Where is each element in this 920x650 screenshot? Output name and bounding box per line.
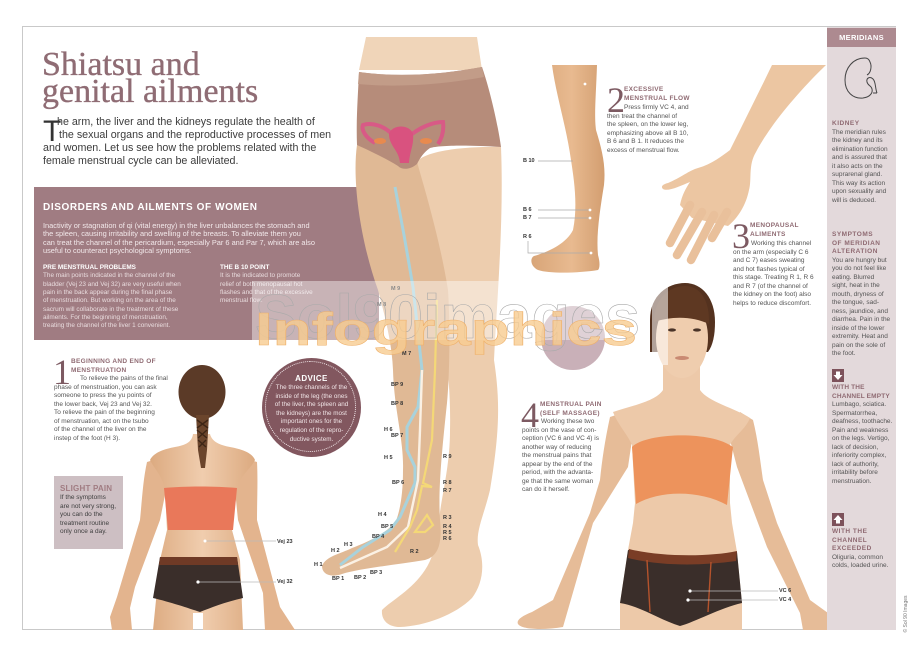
labels: B 6	[523, 207, 532, 213]
symptoms text: sight, heat in the	[832, 282, 880, 289]
sidebar heading	[827, 28, 896, 47]
illustration: conception vessel circle	[541, 306, 605, 370]
kidney text: will is deduced.	[832, 196, 876, 204]
step 2 body: the spleen, on the lower leg,	[607, 121, 688, 128]
right arm	[232, 455, 295, 630]
channel exceeded text	[832, 528, 888, 569]
symptoms text: extremity. Heat and	[832, 333, 888, 340]
point labels: H 2	[331, 548, 340, 554]
step 3 body: Working this channel	[751, 240, 811, 247]
pre menstrual problems: ailments. For the beginning of menstruation,	[43, 314, 168, 321]
step 4 body: ception (VC 6 and VC 4) is	[522, 435, 599, 442]
step 3 body: the kidney on the foot) also	[733, 291, 811, 298]
watermark orange text: Infographics	[255, 303, 637, 355]
channel exceeded text: colds, loaded urine.	[832, 562, 888, 569]
point labels: BP 3	[370, 570, 382, 576]
point labels: M 9	[391, 286, 400, 292]
top	[164, 486, 237, 530]
step 2 heading: EXCESSIVE	[624, 86, 664, 93]
symptoms text: You are hungry but	[832, 256, 887, 264]
kidney text	[832, 120, 888, 204]
figure: leg with B points	[523, 65, 605, 273]
step 2 body: B 6 and B 1. It reduces the	[607, 138, 684, 145]
advice text: inside of the leg (the ones	[275, 393, 348, 400]
point labels	[314, 286, 452, 582]
step 3 body: and hot flashes typical of	[733, 266, 805, 272]
step 1 body: someone to press the yu points of	[54, 392, 152, 399]
intro paragraph: and women. Let us see how the problems related with the	[43, 142, 316, 154]
channel empty text: menstruation.	[832, 478, 871, 484]
step 1 body: of the channel of the liver on the	[54, 426, 147, 433]
point labels: R 6	[443, 536, 452, 542]
title	[42, 46, 258, 110]
kidney text: the kidney and its	[832, 137, 883, 144]
step 4 body: Working these two	[541, 418, 594, 425]
figure: back view	[110, 365, 295, 630]
panel heading: DISORDERS AND AILMENTS OF WOMEN	[43, 202, 258, 213]
point labels: BP 6	[392, 480, 404, 486]
step 4 body: ge that the same woman	[522, 478, 593, 484]
panel intro text	[43, 221, 315, 255]
step 3 body	[733, 240, 814, 306]
callout body: only once a day.	[60, 528, 107, 535]
panel intro text: Inactivity or stagnation of qi (vital energy) in the liver unbalances the stomach and	[43, 221, 310, 230]
step 1 heading	[71, 358, 156, 374]
intro paragraph: female menstrual cycle can be alleviated.	[43, 155, 238, 167]
channel empty text: lack of authority,	[832, 460, 879, 468]
pre menstrual problems: PRE MENSTRUAL PROBLEMS	[43, 264, 136, 271]
icon: kidney	[844, 58, 878, 99]
step 1 text	[53, 352, 168, 442]
step 4 body: points on the vase of con-	[522, 426, 596, 434]
channel empty text: Spermatorrhea,	[832, 410, 877, 416]
labels	[523, 158, 592, 254]
symptoms text: the foot.	[832, 350, 856, 357]
step 1 body: the lower back, Vej 23 and Vej 32.	[54, 400, 152, 408]
labels: B 7	[523, 215, 532, 221]
point labels: BP 2	[354, 575, 366, 581]
advice text: important ones for the	[281, 418, 342, 425]
step 2 text	[607, 80, 690, 154]
point labels: BP 5	[381, 524, 393, 530]
kidney text: and is assured that	[832, 154, 887, 161]
channel empty text: CHANNEL EMPTY	[832, 392, 890, 400]
pre menstrual problems: bladder (Vej 23 and Vej 32) are very useful when	[43, 281, 181, 288]
pre menstrual problems: The main points indicated in the channel of the	[43, 272, 175, 279]
shorts	[153, 557, 243, 612]
step 2 body: excess of menstrual flow.	[607, 146, 680, 154]
step 3 text	[732, 216, 814, 306]
step 4 heading: MENSTRUAL PAIN	[540, 401, 602, 408]
points: Vej 32	[277, 579, 293, 585]
callout body: are not very strong,	[60, 502, 116, 510]
intro paragraph	[43, 116, 331, 167]
points	[196, 539, 293, 585]
point labels: BP 8	[391, 401, 403, 407]
advice text: the kidneys) are the most	[276, 410, 347, 417]
blue meridian: liver	[340, 187, 422, 565]
step 1 body: To relieve the pains of the final	[80, 375, 168, 382]
drop cap: T	[43, 115, 61, 148]
step 4 body: period, with the advanta-	[522, 469, 593, 476]
point labels: R 5	[443, 530, 452, 536]
step 3 heading: MENOPAUSAL	[750, 222, 799, 229]
watermark outline text: Sol90images	[255, 283, 640, 352]
channel exceeded text: WITH THE	[832, 528, 867, 535]
figure: front view	[518, 283, 828, 630]
left arm	[518, 412, 632, 629]
advice text: ductive system.	[290, 436, 333, 443]
step 2 heading	[624, 86, 690, 102]
symptoms text: OF MERIDIAN	[832, 240, 880, 246]
channel empty text: irritability before	[832, 469, 878, 476]
the B 10 point: THE B 10 POINT	[220, 264, 269, 271]
points	[686, 588, 792, 603]
orange top	[632, 435, 733, 505]
step 1 body: phase of menstruation, you can ask	[54, 384, 157, 390]
channel exceeded text: CHANNEL	[832, 536, 867, 544]
channel empty text: lack of decision,	[832, 444, 878, 450]
callout body	[60, 494, 116, 535]
channel empty text: Pain and weakness	[832, 426, 888, 434]
symptoms text: ALTERATION	[832, 248, 878, 255]
pre menstrual problems: treating the channel of the liver 1 convenient.	[43, 322, 170, 329]
hair and braid	[178, 365, 226, 468]
step 1 heading: BEGINNING AND END OF	[71, 358, 156, 365]
pre menstrual problems: sacrum will collaborate in the treatment of these	[43, 306, 178, 313]
point labels: BP 9	[391, 382, 403, 388]
dotted ring	[265, 361, 356, 452]
step 3 heading: ALIMENTS	[750, 230, 786, 238]
symptoms text: mouth, dryness of	[832, 290, 884, 298]
step 2 body: then treat the channel of	[607, 112, 677, 120]
symptoms text	[832, 231, 890, 357]
the B 10 point	[220, 264, 313, 304]
title: Shiatsu and	[42, 46, 200, 83]
point labels: M 7	[402, 351, 411, 357]
step 1 body: of menstruation, act on the tsubo	[54, 418, 149, 424]
symptoms text: pain on the sole of	[832, 342, 885, 348]
channel exceeded text: EXCEEDED	[832, 545, 872, 552]
head and hair	[650, 283, 715, 378]
panel intro text: the spleen, causing irritability and swelling of the breasts. To alleviate them you	[43, 229, 301, 238]
symptoms text: diarrhea. Pain in the	[832, 316, 890, 323]
labels: R 6	[523, 234, 532, 240]
callout heading: SLIGHT PAIN	[60, 484, 112, 493]
panel: meridians sidebar	[827, 27, 896, 630]
symptoms text: eating. Blurred	[832, 274, 874, 280]
symptoms text: you do not feel like	[832, 265, 886, 272]
symptoms text: inside of the lower	[832, 324, 884, 332]
advice text: regulation of the repro-	[280, 427, 343, 434]
step 4 body: can do it herself.	[522, 486, 570, 493]
point labels: R 3	[443, 515, 452, 521]
torso and legs	[613, 365, 750, 630]
number 4: 4	[521, 395, 539, 435]
callout: advice	[262, 358, 361, 457]
number 2: 2	[607, 80, 625, 120]
point labels: H 4	[378, 512, 388, 518]
copyright: © Sol 90 Images	[903, 595, 909, 633]
step 3 body: and R 7 (of the channel of	[733, 282, 808, 290]
torso	[359, 37, 482, 70]
the B 10 point: flashes and that of the excessive	[220, 289, 313, 296]
symptoms text: SYMPTOMS	[832, 231, 873, 238]
step 1 body: instep of the foot (H 3).	[54, 434, 120, 442]
step 1 heading: MENSTRUATION	[71, 366, 126, 374]
channel empty text: deafness, toothache.	[832, 418, 892, 425]
icon: down arrow	[832, 369, 844, 382]
point labels: H 1	[314, 562, 323, 568]
step 3 body: and C 7) eases sweating	[733, 257, 805, 264]
the B 10 point: It is the indicated to promote	[220, 272, 300, 279]
callout body: If the symptoms	[60, 494, 106, 501]
channel empty text: inferiority complex,	[832, 452, 886, 459]
step 2 heading: MENSTRUAL FLOW	[624, 94, 690, 102]
left arm	[110, 455, 170, 630]
intro paragraph: he arm, the liver and the kidneys regulate the health of	[57, 116, 315, 128]
point labels: H 3	[344, 542, 353, 548]
point labels: BP 1	[332, 576, 344, 582]
advice text: of the liver, the spleen and	[275, 401, 348, 408]
watermark face overlay	[652, 285, 668, 365]
step 1 body: To relieve the pain of the beginning	[54, 409, 155, 416]
step 4 body: appear by the end of the	[522, 460, 592, 468]
points: Vej 23	[277, 539, 293, 545]
title: genital ailments	[42, 73, 258, 110]
pre menstrual problems: pain in the back appear during the final phase	[43, 289, 172, 296]
kidney text: The meridian rules	[832, 128, 886, 136]
panel intro text: can treat the channel of the pericardium, especially Par 6 and Par 7, which are also	[43, 238, 315, 247]
left leg	[322, 145, 449, 576]
channel empty text: on the legs. Vertigo,	[832, 435, 889, 442]
callout body: treatment routine	[60, 520, 109, 526]
kidney text: KIDNEY	[832, 120, 860, 127]
step 3 body: on the arm (especially C 6	[733, 248, 809, 256]
step 2 body: Press firmly VC 4, and	[624, 104, 689, 111]
step 3 body: this stage. Treating R 1, R 6	[733, 274, 814, 281]
panel: disorders and ailments of women	[34, 187, 379, 340]
symptoms text: the tongue, sad-	[832, 299, 879, 306]
labels: B 10	[523, 158, 535, 164]
step 3 body: helps to reduce discomfort.	[733, 300, 811, 306]
white meridian: spleen	[340, 370, 422, 568]
kidney text: upon sexuality and	[832, 188, 886, 195]
the B 10 point: relief of both menopausal hot	[220, 281, 302, 288]
step 4 body: the menstrual pains that	[522, 452, 591, 459]
advice text: ADVICE	[295, 374, 328, 383]
points: VC 6	[779, 588, 791, 594]
point labels: R 4	[443, 524, 452, 530]
step 2 body: emphasizing above all B 10,	[607, 130, 688, 136]
channel empty text: WITH THE	[832, 384, 865, 391]
point labels: R 7	[443, 488, 452, 494]
intro text	[43, 115, 331, 167]
shorts overlay	[357, 67, 501, 169]
step 4 body	[522, 418, 599, 493]
sidebar heading: MERIDIANS	[839, 33, 884, 42]
number 1: 1	[53, 352, 71, 392]
figure: legs with meridians	[314, 37, 502, 627]
advice text	[275, 374, 348, 443]
right arm	[730, 412, 828, 630]
shorts	[620, 550, 742, 626]
callout body: you can do the	[60, 511, 103, 518]
step 4 text	[521, 395, 602, 493]
intro paragraph: the sexual organs and the reproductive processes of men	[59, 129, 331, 141]
advice text: The three channels of the	[276, 384, 347, 391]
kidney text: it also acts on the	[832, 162, 883, 170]
the B 10 point: menstrual flow.	[220, 297, 263, 304]
step 3 heading	[750, 222, 799, 238]
waistband	[358, 67, 484, 86]
torso and legs	[150, 434, 255, 630]
step 4 heading: (SELF MASSAGE)	[540, 410, 600, 416]
uterus	[363, 122, 443, 163]
point labels: R 8	[443, 480, 452, 486]
step 4 body: another way of reducing	[522, 444, 591, 450]
point labels: R 2	[410, 549, 419, 555]
channel empty text	[832, 384, 892, 484]
step 4 heading	[540, 401, 602, 416]
channel empty text: Lumbago, sciatica.	[832, 401, 886, 408]
point labels: BP 7	[391, 433, 403, 439]
kidney text: This way its action	[832, 180, 885, 186]
step 1 body	[54, 375, 168, 442]
pre menstrual problems: of menstruation. But working on the area of the	[43, 297, 176, 304]
callout: slight pain	[54, 476, 123, 549]
step 2 body	[607, 104, 689, 154]
channel exceeded text: Oliguria, common	[832, 554, 883, 560]
symptoms text: ness, jaundice, and	[832, 308, 888, 314]
point labels: BP 4	[372, 534, 385, 540]
points: VC 4	[779, 597, 792, 603]
figure: open hand	[662, 65, 826, 260]
watermark band	[252, 281, 640, 340]
point labels: H 5	[384, 455, 393, 461]
point labels: H 6	[384, 427, 393, 433]
point labels: M 8	[377, 302, 386, 308]
right leg	[382, 147, 502, 627]
kidney text: elimination function	[832, 146, 888, 152]
panel intro text: useful to counteract psychological symptoms.	[43, 246, 192, 255]
kidney text: suprarenal gland.	[832, 171, 882, 178]
pre menstrual problems	[43, 264, 181, 329]
number 3: 3	[732, 216, 750, 256]
point labels: R 9	[443, 454, 452, 460]
yellow meridian: kidney	[395, 300, 437, 552]
icon: up arrow	[832, 513, 844, 526]
